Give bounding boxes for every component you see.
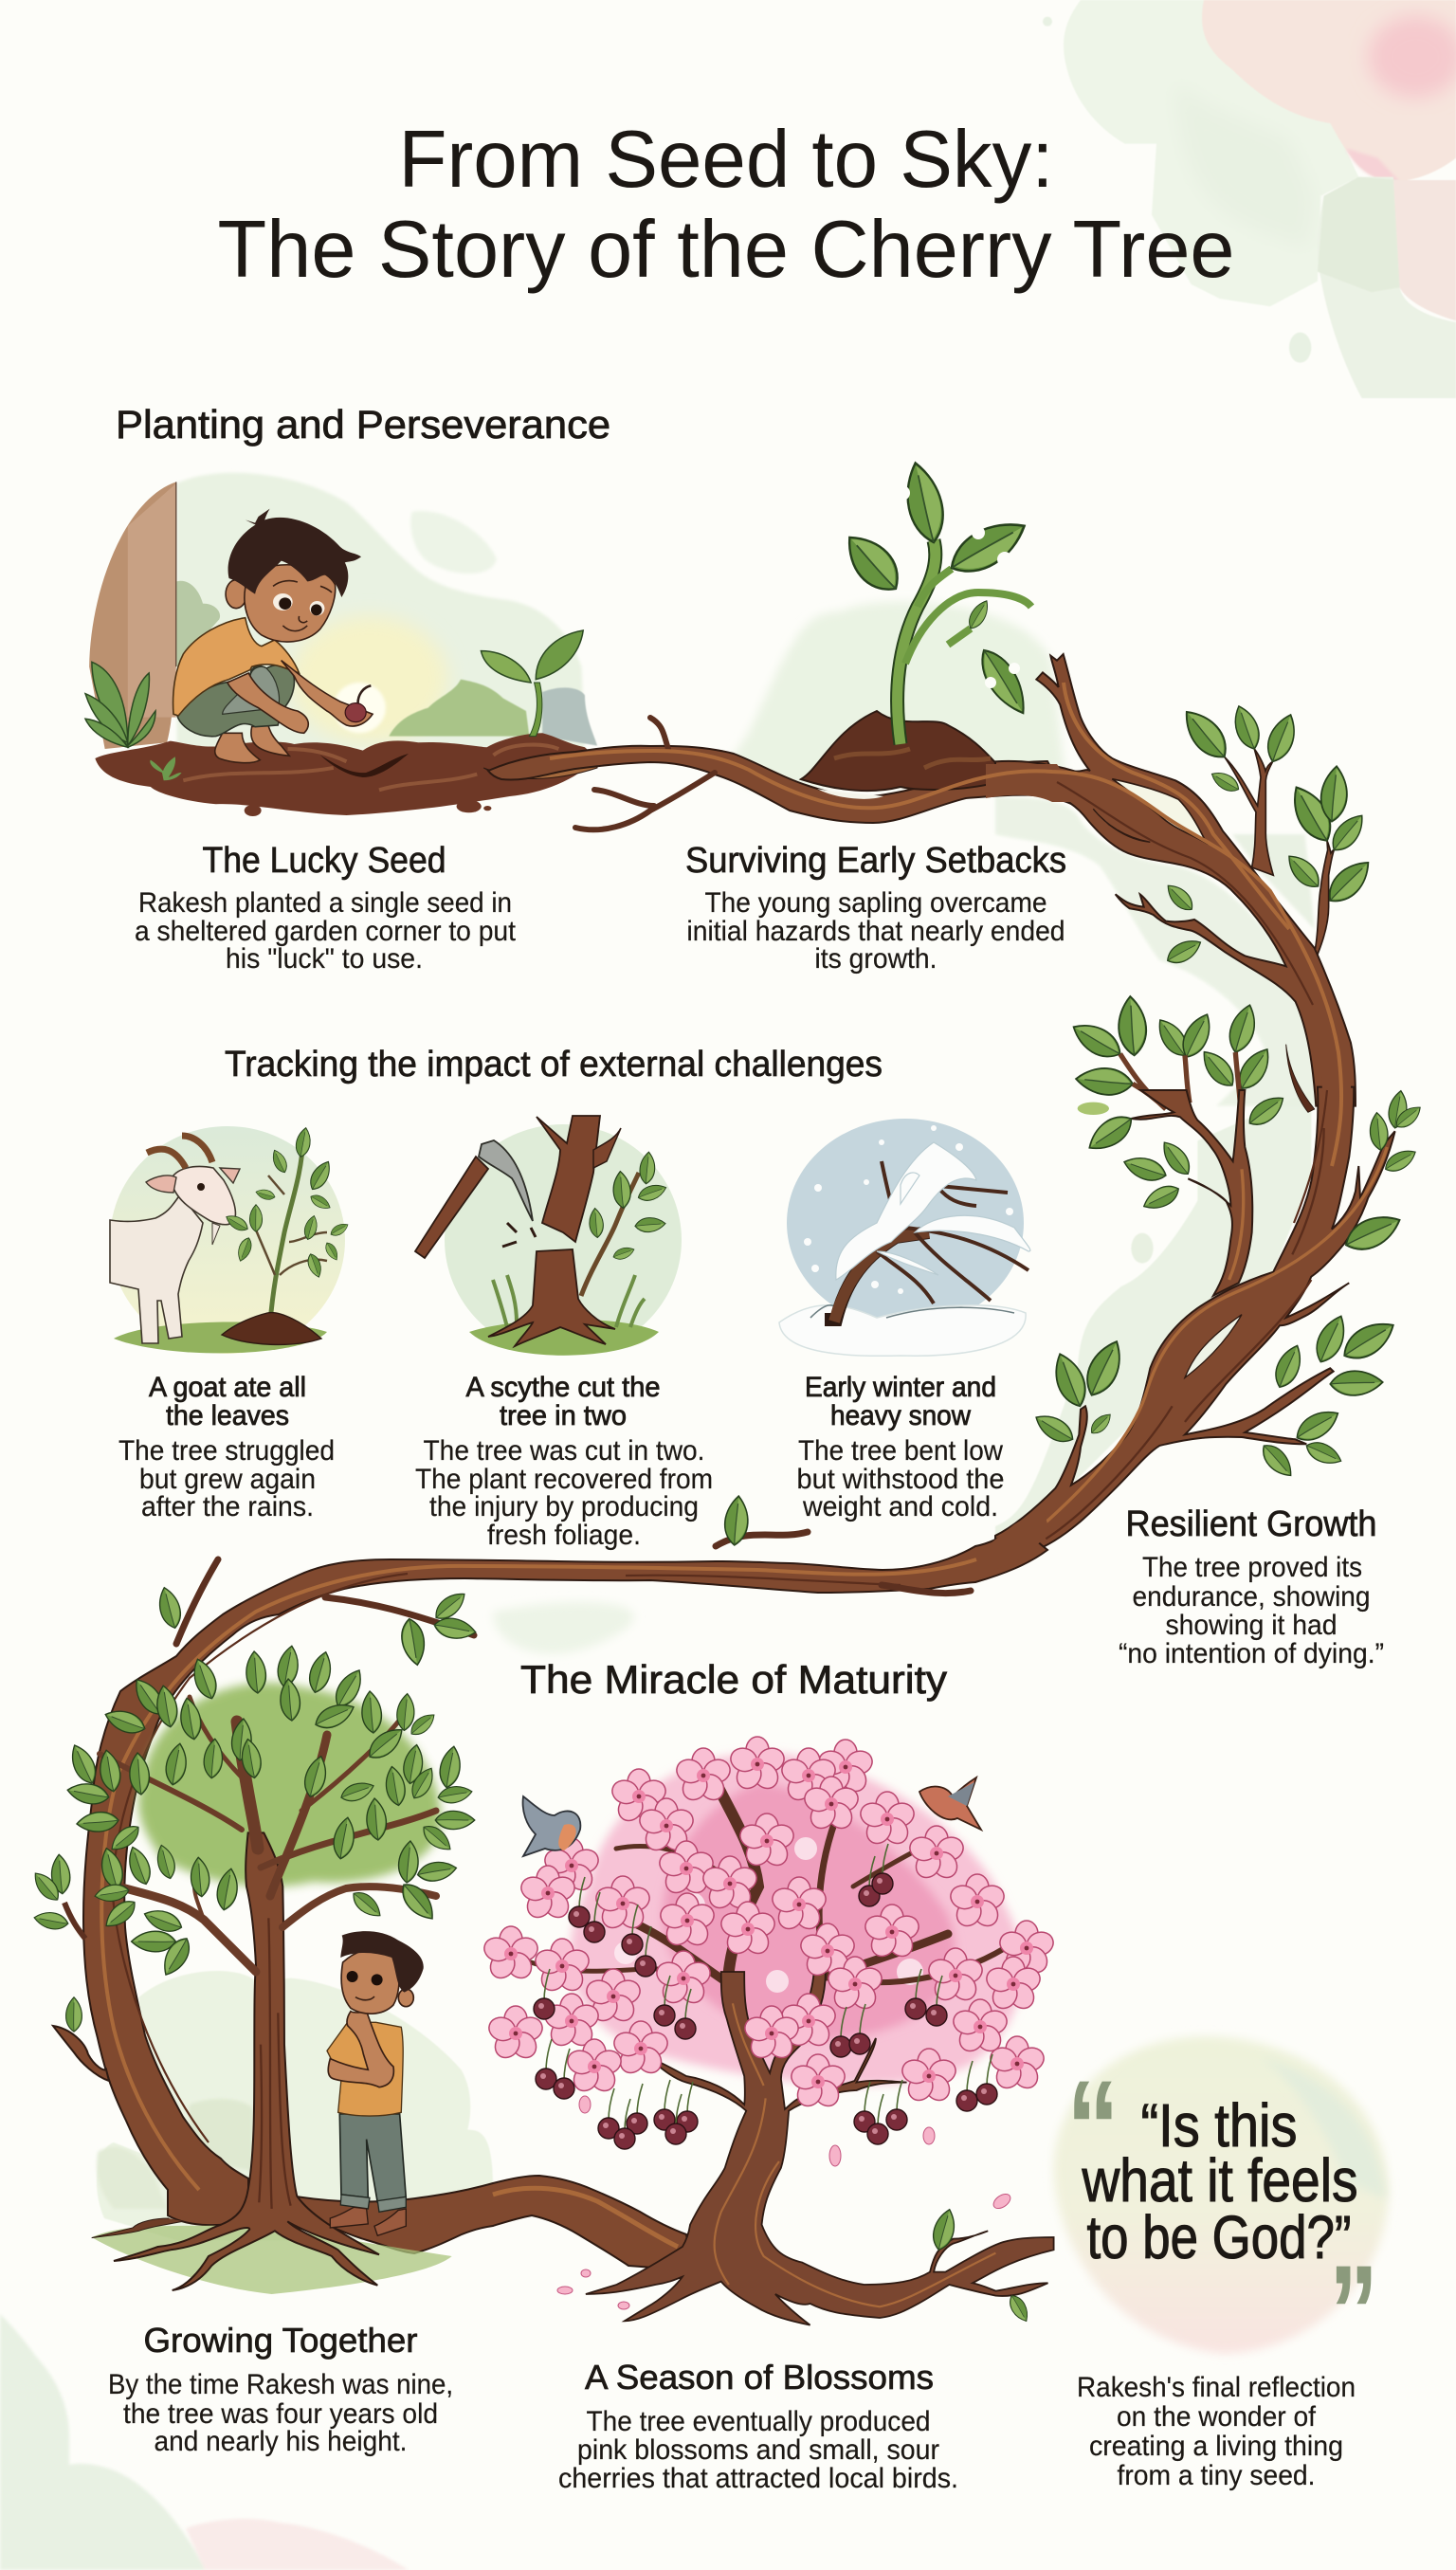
text: Resilient Growth: “no intention of dying.”	[1119, 1638, 1384, 1669]
small leaves on vine	[66, 1495, 750, 2032]
bird right	[919, 1777, 981, 1830]
text: A Season of Blossoms: The tree eventually produced	[586, 2406, 931, 2437]
wash behind lower vine	[995, 1090, 1311, 1536]
left stub twig	[53, 2026, 109, 2081]
text: scythe caption: A scythe cut the	[466, 1372, 660, 1403]
quote bubble	[1053, 2036, 1389, 2386]
gap	[1185, 1315, 1242, 1377]
sprout	[529, 683, 542, 737]
cherries	[534, 1844, 997, 2149]
text: snow caption: weight and cold.	[802, 1491, 998, 1522]
trunk and right root	[586, 1972, 1054, 2325]
text: Resilient Growth	[1119, 1504, 1384, 1669]
branches	[531, 1782, 1005, 1982]
bite marks	[835, 485, 1020, 688]
bark marks	[101, 1559, 976, 2190]
eyes and smile	[347, 1971, 358, 1982]
heading: Tracking the impact of external challenges: Tracking the impact of external challenges	[225, 1045, 883, 1085]
heading: The Miracle of Maturity: The Miracle of Maturity	[520, 1657, 947, 1702]
text: scythe caption: The plant recovered from	[415, 1464, 713, 1495]
quote text: to be God?”	[1086, 2203, 1352, 2271]
text: final reflection: from a tiny seed.	[1117, 2460, 1316, 2491]
hair	[340, 1931, 424, 1993]
text: scythe caption	[415, 1372, 713, 1551]
grass	[493, 1275, 645, 1327]
background wash	[176, 473, 585, 749]
face	[341, 1949, 399, 2014]
leaves	[1031, 1089, 1425, 1482]
grass under tree	[92, 2225, 452, 2294]
text: snow caption: The tree bent low	[798, 1435, 1003, 1467]
folded arms	[328, 2012, 393, 2087]
pants	[339, 2114, 406, 2202]
text: The Lucky Seed: a sheltered garden corner to put	[135, 916, 517, 947]
shorts	[176, 665, 294, 737]
text: Surviving Early Setbacks: The young sapling overcame	[705, 887, 1046, 919]
text: goat caption	[118, 1372, 335, 1522]
text: A Season of Blossoms: A Season of Blossoms	[585, 2358, 934, 2397]
ear	[226, 580, 246, 609]
pink blossom wash	[571, 1754, 1023, 2085]
text: scythe caption: fresh foliage.	[487, 1520, 641, 1551]
text: goat caption: the leaves	[166, 1400, 289, 1431]
leaves	[1067, 702, 1377, 1097]
tree: young green tree	[29, 1644, 475, 2294]
inner branch	[1131, 1090, 1252, 1296]
text: final reflection: Rakesh's final reflection	[1077, 2372, 1356, 2403]
trunk and roots	[92, 1832, 452, 2294]
hanging leaf	[973, 643, 1035, 720]
bird left	[523, 1796, 580, 1856]
text: snow caption	[796, 1372, 1005, 1522]
text: snow caption: Early winter and	[805, 1372, 996, 1403]
wash behind standing boy	[97, 1971, 493, 2240]
cuffs	[340, 2195, 406, 2212]
vine seam patches and bark highlights, upper	[550, 683, 1351, 1223]
wash behind upper vine	[995, 796, 1324, 1106]
wall	[89, 482, 176, 749]
twig b	[1315, 841, 1334, 955]
background bushes	[176, 581, 220, 666]
heading: Planting and Perseverance: Planting and Perseverance	[116, 402, 610, 447]
right leaf	[943, 511, 1033, 583]
front foot	[215, 733, 260, 763]
eyes and smile	[273, 593, 293, 611]
main vine: ground branch	[284, 2176, 692, 2270]
hair	[228, 509, 361, 597]
icon: goat eating leaves	[110, 1126, 350, 1354]
main vine: long run and lower left trunk	[53, 1507, 1050, 2225]
tree: cherry tree in blossom	[482, 1737, 1056, 2325]
title: From Seed to Sky:	[398, 115, 1054, 205]
text: Resilient Growth: showing it had	[1166, 1610, 1337, 1641]
vine root tongue	[483, 758, 597, 779]
bark marks	[1027, 1147, 1387, 1539]
text: goat caption: but grew again	[139, 1464, 316, 1495]
text: goat caption: A goat ate all	[149, 1372, 306, 1403]
trunk and crossing strand	[995, 1087, 1395, 1555]
snow clumps	[836, 1142, 1030, 1280]
side twigs	[176, 1532, 971, 1644]
gaps between strands	[1112, 779, 1207, 843]
watercolour wash: top right	[1043, 0, 1456, 398]
watercolour wash: bottom left	[0, 2314, 409, 2570]
text: Growing Together: By the time Rakesh was nine,	[108, 2369, 453, 2400]
sapling with damaged leaves	[801, 459, 1035, 791]
text: The Lucky Seed	[135, 841, 517, 975]
opening quote mark: “	[1066, 2052, 1119, 2201]
small leaf at vine tip	[1006, 2292, 1032, 2324]
text: A Season of Blossoms: pink blossoms and small, sour	[577, 2434, 939, 2466]
seam patch	[986, 1507, 1050, 1574]
title	[218, 115, 1234, 295]
leaves	[29, 1644, 475, 1979]
upper trunk	[537, 1116, 600, 1242]
text: Growing Together: Growing Together	[144, 2321, 418, 2360]
impact marks	[502, 1223, 536, 1247]
blossoms	[482, 1737, 1056, 2111]
title: The Story of the Cherry Tree	[218, 205, 1234, 295]
main vine: top run from soil	[488, 718, 1071, 829]
quote text: what it feels	[1082, 2146, 1357, 2215]
text: Growing Together	[108, 2321, 453, 2457]
text: final reflection: on the wonder of	[1117, 2401, 1317, 2433]
shirt	[327, 2022, 403, 2116]
text: snow caption: heavy snow	[830, 1400, 971, 1431]
illustration: boy planting seed	[85, 473, 597, 816]
icon: scythe cutting tree	[415, 1116, 682, 1356]
text: Surviving Early Setbacks: initial hazards that nearly ended	[686, 916, 1065, 947]
text: Surviving Early Setbacks: Surviving Early Setbacks	[685, 841, 1066, 881]
scythe blade	[479, 1140, 533, 1221]
branches	[100, 1697, 436, 1972]
main vine: upper right fork and trunk	[995, 654, 1377, 1112]
text: Surviving Early Setbacks: its growth.	[815, 943, 937, 975]
quote text	[1082, 2091, 1357, 2271]
text: snow caption: but withstood the	[796, 1464, 1005, 1495]
top leaf	[900, 459, 950, 546]
text: The Lucky Seed: his "luck" to use.	[226, 943, 423, 975]
main vine: middle crossing strands	[995, 1052, 1425, 1555]
soil	[95, 733, 597, 815]
left leaf	[836, 525, 909, 600]
spike	[1286, 1045, 1315, 1112]
stump	[488, 1249, 615, 1346]
scythe handle	[415, 1157, 488, 1258]
text: Resilient Growth: The tree proved its	[1142, 1552, 1362, 1583]
wash behind sapling	[730, 602, 1066, 787]
goat head	[171, 1167, 235, 1225]
text: scythe caption: tree in two	[500, 1400, 627, 1431]
pale patches	[614, 1837, 923, 1993]
text: Resilient Growth: endurance, showing	[1132, 1581, 1371, 1613]
twig a	[1225, 749, 1273, 875]
back foot	[251, 725, 289, 756]
text: The Lucky Seed: Rakesh planted a single seed in	[138, 887, 512, 919]
text: The Lucky Seed: The Lucky Seed	[203, 841, 446, 881]
connecting twigs	[1120, 1052, 1240, 1109]
text: scythe caption: the injury by producing	[429, 1491, 699, 1522]
text: scythe caption: The tree was cut in two.	[423, 1435, 705, 1467]
shirt	[173, 618, 300, 716]
falling snow	[804, 1125, 1013, 1294]
arms	[228, 673, 308, 733]
young sapling	[270, 1138, 303, 1322]
text: Surviving Early Setbacks	[685, 841, 1066, 975]
leafy plant	[85, 662, 155, 747]
knees	[223, 666, 279, 714]
text: Growing Together: the tree was four years old	[123, 2398, 438, 2430]
quote text: “Is this	[1141, 2091, 1297, 2160]
text: goat caption: after the rains.	[141, 1491, 314, 1522]
text: final reflection: creating a living thing	[1089, 2431, 1343, 2462]
wash under lower vine	[493, 1602, 634, 1653]
goat body	[110, 1194, 203, 1343]
text: Resilient Growth: Resilient Growth	[1126, 1504, 1376, 1544]
text: A Season of Blossoms	[558, 2358, 958, 2494]
illustration: boy looking at tree	[327, 1931, 424, 2235]
icon: tree bent under snow	[779, 1119, 1030, 1356]
closing quote mark: ”	[1329, 2237, 1378, 2386]
falling petals	[557, 2096, 1013, 2309]
new shoots	[581, 1173, 639, 1296]
text: Growing Together: and nearly his height.	[154, 2426, 408, 2457]
bark marks on ground branch	[493, 2188, 678, 2247]
ground branch right tip leaves	[929, 2207, 959, 2252]
face	[245, 565, 336, 642]
text: final reflection	[1077, 2372, 1356, 2491]
text: goat caption: The tree struggled	[118, 1435, 335, 1467]
text: A Season of Blossoms: cherries that attracted local birds.	[558, 2463, 958, 2494]
shoes	[330, 2207, 368, 2228]
cherry seed	[345, 703, 366, 722]
